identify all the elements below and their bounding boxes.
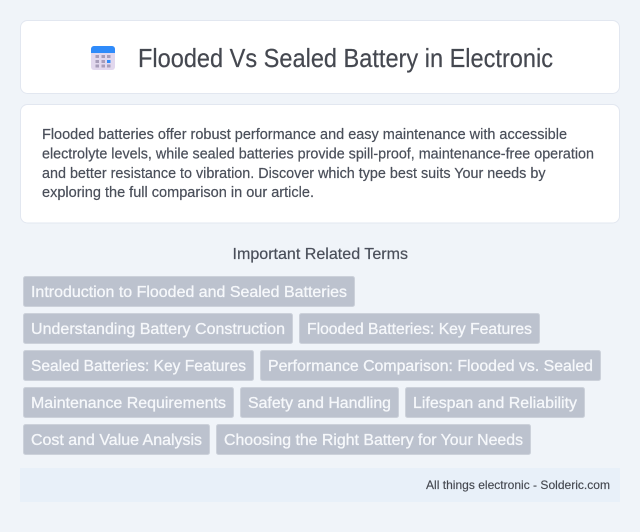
tag: maintenance: Maintenance Requirements — [31, 395, 226, 412]
tag: cost: Cost and Value Analysis — [31, 432, 202, 449]
description card — [20, 104, 620, 223]
footer text: All things electronic - Solderic.com — [426, 478, 610, 492]
tag: flooded features: Flooded Batteries: Key Features — [307, 321, 532, 338]
icon: calendar grid — [91, 46, 115, 70]
tag: construction — [24, 314, 292, 344]
tag: safety: Safety and Handling — [248, 395, 391, 412]
tag: performance: Performance Comparison: Flooded vs. Sealed — [268, 358, 593, 375]
tag list — [24, 276, 600, 454]
tag: sealed features — [24, 350, 254, 380]
tag: choosing: Choosing the Right Battery for Your Needs — [224, 432, 523, 449]
description text — [42, 127, 594, 201]
description text: and better resistance to vibration. Discover which type best suits Your needs by — [42, 166, 546, 182]
tag: performance — [260, 350, 600, 380]
tag: lifespan: Lifespan and Reliability — [413, 395, 577, 412]
tag: flooded features — [300, 314, 540, 344]
tag: construction: Understanding Battery Construction — [31, 321, 285, 338]
footer — [20, 468, 620, 502]
tag: introduction — [24, 276, 354, 306]
tag: introduction: Introduction to Flooded and Sealed Batteries — [31, 284, 347, 301]
tag: maintenance — [24, 388, 234, 418]
tag: choosing — [216, 424, 530, 454]
tag: lifespan — [406, 388, 584, 418]
heading: related terms: Important Related Terms — [232, 246, 408, 263]
tag: cost — [24, 424, 210, 454]
description text: electrolyte levels, while sealed batteries provide spill-proof, maintenance-free operation — [42, 146, 594, 162]
description text: Flooded batteries offer robust performance and easy maintenance with accessible — [42, 127, 567, 143]
description text: exploring the full comparison in our article. — [42, 185, 314, 201]
header card — [20, 20, 620, 94]
tag: safety — [240, 388, 398, 418]
title: Flooded Vs Sealed Battery in Electronic — [138, 45, 553, 73]
tag: sealed features: Sealed Batteries: Key Features — [31, 358, 246, 375]
